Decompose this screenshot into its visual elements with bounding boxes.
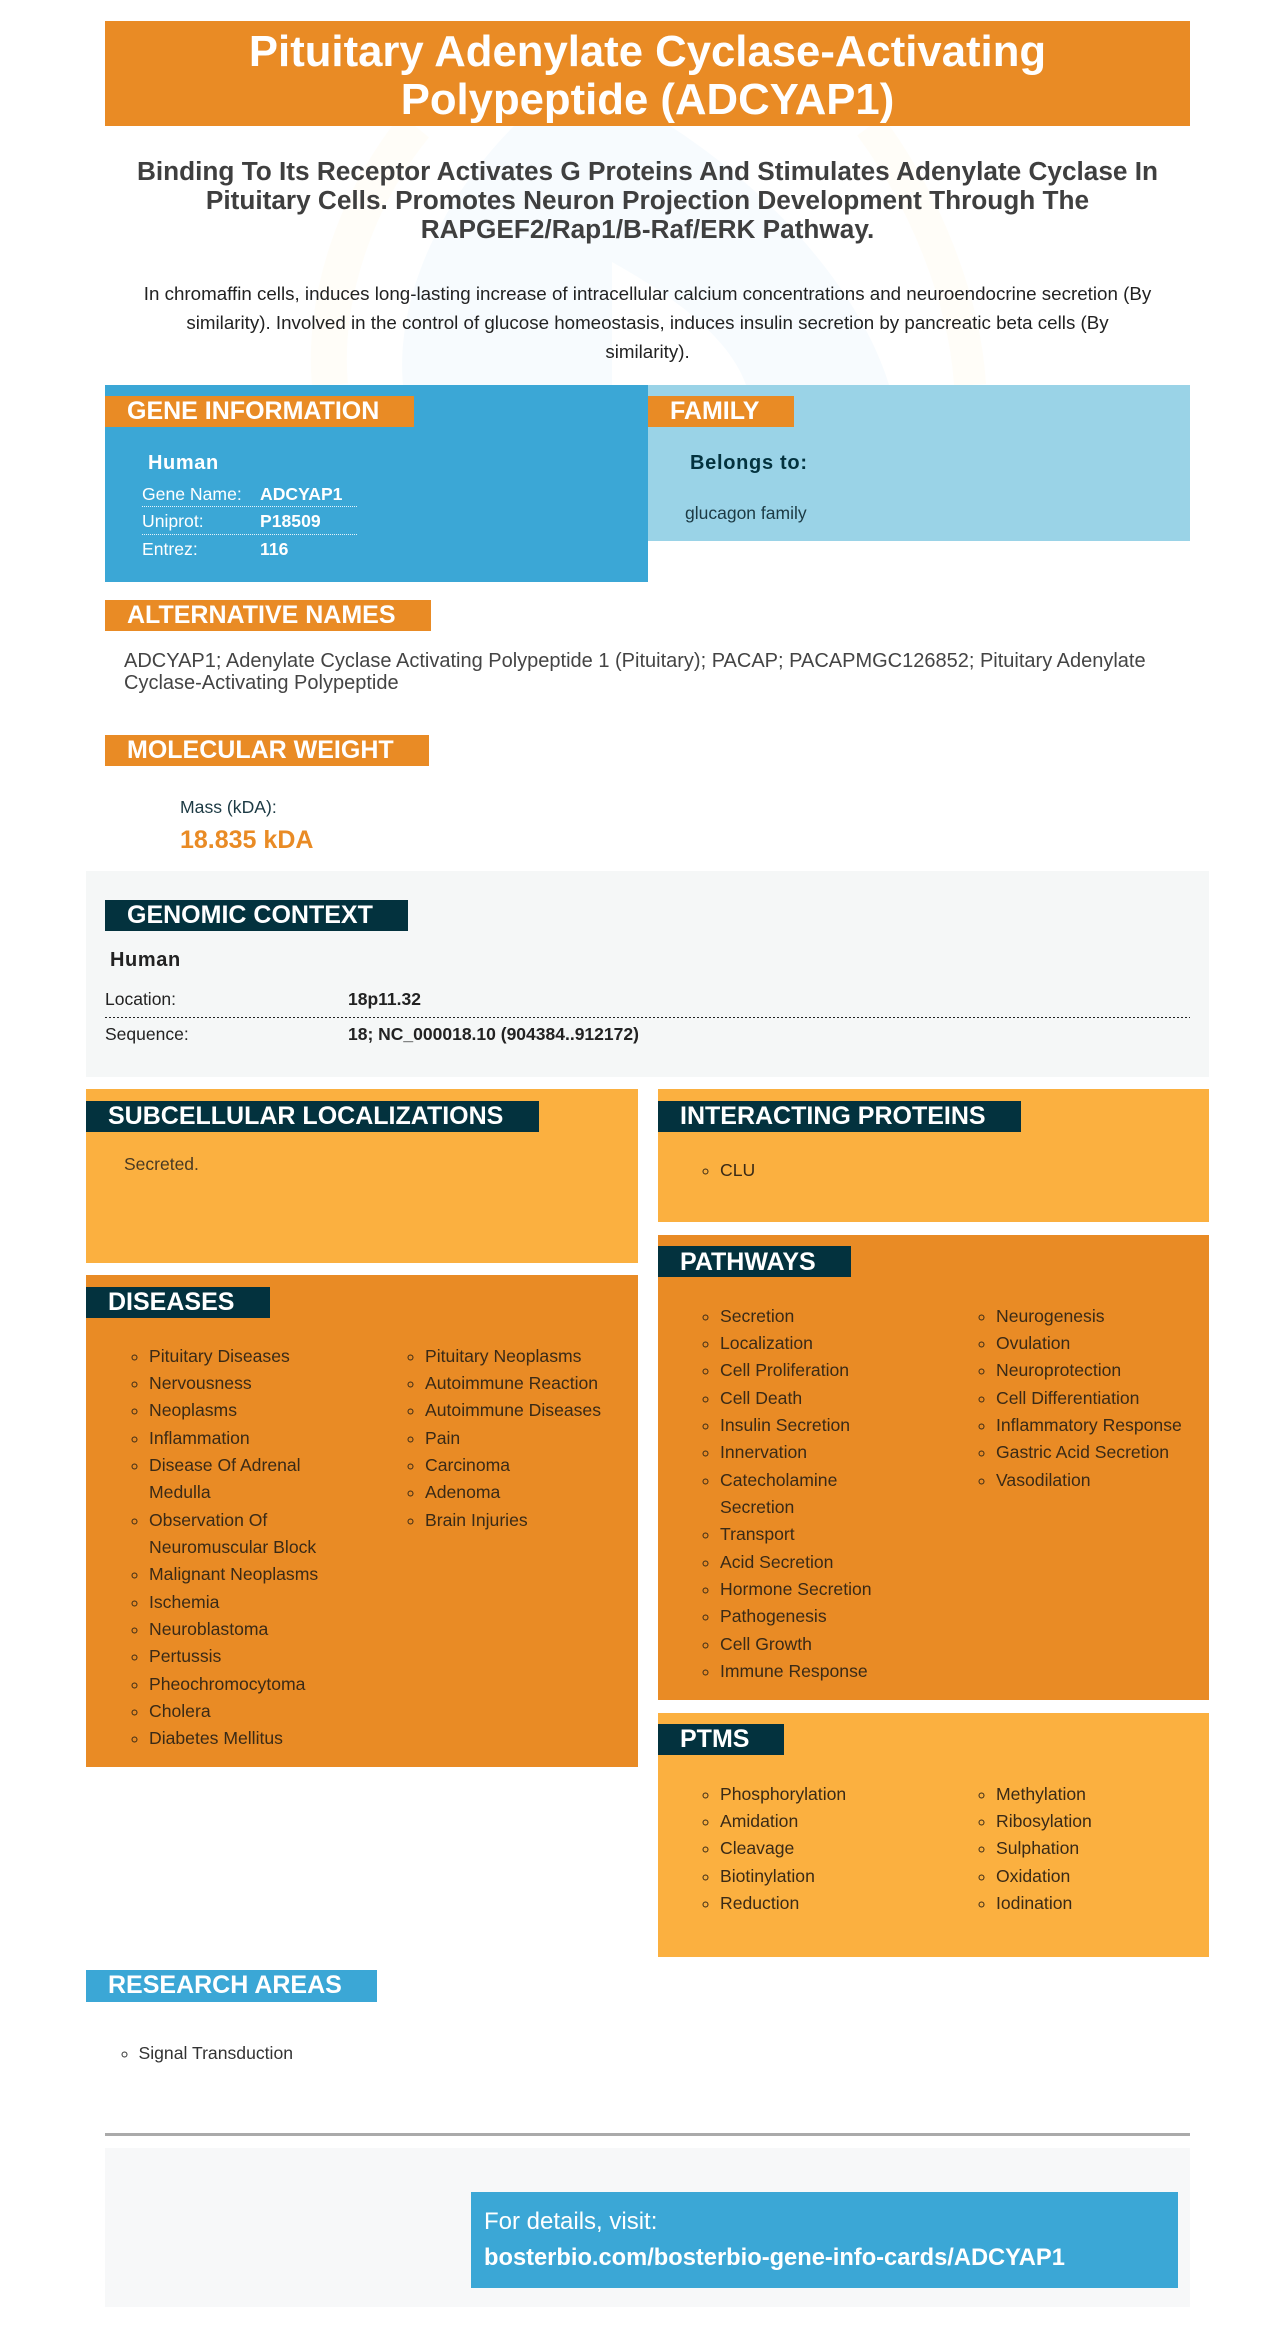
footer rule [105,2133,1190,2136]
panel: interacting proteins [658,1089,1209,1222]
subtitle: RAPGEF2/Rap1/B-Raf/ERK Pathway. [421,214,874,244]
location row [105,988,1190,1018]
localization text: Secreted. [124,1154,199,1174]
heading: gene information: GENE INFORMATION [127,397,379,425]
heading: research areas: RESEARCH AREAS [108,1971,342,1999]
alternative names text: Cyclase-Activating Polypeptide [124,672,399,694]
disease list column 1: Neuroblastoma [149,1619,268,1639]
disease list column 1: Pertussis [149,1646,221,1666]
heading: pathways: PATHWAYS [680,1248,816,1276]
gene rows [142,484,357,559]
panel: genomic context [86,871,1209,1077]
disease list column 2: Autoimmune Diseases [425,1400,601,1420]
heading: molecular weight: MOLECULAR WEIGHT [127,736,394,764]
heading: family: FAMILY [670,397,759,425]
disease list column 1: Cholera [149,1701,211,1721]
heading: family [648,396,794,427]
description: In chromaffin cells, induces long-lasting increase of intracellular calcium concentrations and neuroendocrine secretion (By [144,283,1151,304]
family value: glucagon family [685,503,807,523]
mass label: Mass (kDA): [180,797,277,817]
disease list column 1: Nervousness [149,1373,252,1393]
subtitle [137,156,1158,244]
panel: footer [105,2148,1190,2307]
panel: family [648,385,1190,541]
pathway list column 2: Neurogenesis [996,1306,1105,1326]
heading: ptms: PTMS [680,1725,749,1753]
belongs to label: Belongs to: [690,452,808,474]
background watermark [0,126,1288,385]
heading: diseases [86,1287,270,1318]
disease list column 1: Inflammation [149,1428,250,1448]
subtitle: Binding To Its Receptor Activates G Proteins And Stimulates Adenylate Cyclase In [137,156,1158,186]
ptm list column 1 [702,1784,846,1913]
disease list column 1: Ischemia [149,1592,219,1612]
disease list column 2: Pituitary Neoplasms [425,1346,581,1366]
panel: ptms [658,1713,1209,1957]
title: Polypeptide (ADCYAP1) [401,75,894,124]
species label: Human [110,949,181,971]
research areas list: Signal Transduction [138,2043,293,2063]
disease list column 1: Observation Of [149,1510,267,1530]
pathway list column 2: Inflammatory Response [996,1415,1182,1435]
pathway list column 1: Secretion [720,1306,794,1326]
disease list column 1: Medulla [149,1482,211,1502]
pathway list column 1 [702,1306,872,1681]
disease list column 1: Pheochromocytoma [149,1674,305,1694]
description [144,283,1152,362]
pathway list column 1: Cell Death [720,1388,802,1408]
pathway list column 1: Cell Proliferation [720,1360,849,1380]
disease list column 2 [408,1346,601,1530]
ptm list column 1: Reduction [720,1893,799,1913]
ptm list column 2: Ribosylation [996,1811,1092,1831]
disease list column 1 [132,1346,318,1748]
ptm list column 2 [978,1784,1092,1913]
disease list column 1: Neuromuscular Block [149,1537,316,1557]
disease list column 1: Neoplasms [149,1400,237,1420]
heading: interacting proteins: INTERACTING PROTEINS [680,1102,986,1130]
panel: subcellular localizations [86,1089,638,1263]
alternative names text: ADCYAP1; Adenylate Cyclase Activating Polypeptide 1 (Pituitary); PACAP; PACAPMGC126852; Pituitary Adenylate [124,650,1146,672]
subtitle: Pituitary Cells. Promotes Neuron Projection Development Through The [206,185,1089,215]
disease list column 2: Carcinoma [425,1455,510,1475]
visit label: For details, visit: [484,2208,657,2235]
heading: ptms [658,1724,784,1755]
alternative names text [124,650,1146,694]
disease list column 2: Brain Injuries [425,1510,528,1530]
sequence row: Sequence: [105,1024,189,1044]
disease list column 1: Malignant Neoplasms [149,1564,318,1584]
location row: 18p11.32 [348,989,421,1009]
sequence row [105,1024,639,1044]
gene rows: Uniprot: [142,511,204,531]
gene rows: 116 [260,539,288,559]
title: Pituitary Adenylate Cyclase-Activating [249,27,1046,76]
description: similarity). [605,341,690,362]
gene rows: ADCYAP1 [260,484,342,504]
sequence row: 18; NC_000018.10 (904384..912172) [348,1024,639,1044]
panel: diseases [86,1275,638,1767]
call to action box [471,2192,1178,2288]
pathway list column 2: Neuroprotection [996,1360,1121,1380]
location row: Location: [105,989,176,1009]
ptm list column 2: Iodination [996,1893,1072,1913]
heading: alternative names: ALTERNATIVE NAMES [127,601,396,629]
ptm list column 1: Amidation [720,1811,798,1831]
disease list column 2: Pain [425,1428,460,1448]
title [105,21,1190,126]
disease list column 2: Adenoma [425,1482,500,1502]
mass value: 18.835 kDA [180,826,313,854]
disease list column 1: Disease Of Adrenal [149,1455,301,1475]
panel: gene information [105,385,648,582]
pathway list column 1: Pathogenesis [720,1606,827,1626]
pathway list column 1: Hormone Secretion [720,1579,872,1599]
visit link: bosterbio.com/bosterbio-gene-info-cards/ADCYAP1 [484,2245,1065,2271]
disease list column 1: Diabetes Mellitus [149,1728,283,1748]
pathway list column 2: Cell Differentiation [996,1388,1139,1408]
pathway list column 1: Cell Growth [720,1634,812,1654]
description: similarity). Involved in the control of glucose homeostasis, induces insulin secretion by pancreatic beta cells (By [186,312,1109,333]
gene rows: Entrez: [142,539,198,559]
species label: Human [148,452,219,474]
pathway list column 1: Acid Secretion [720,1552,833,1572]
pathway list column 1: Localization [720,1333,813,1353]
panel: pathways [658,1235,1209,1700]
disease list column 1: Pituitary Diseases [149,1346,290,1366]
heading: diseases: DISEASES [108,1288,234,1316]
ptm list column 2: Sulphation [996,1838,1079,1858]
pathway list column 1: Transport [720,1524,795,1544]
protein list: CLU [720,1160,755,1180]
pathway list column 1: Catecholamine [720,1470,837,1490]
heading: subcellular localizations: SUBCELLULAR LOCALIZATIONS [108,1102,503,1130]
pathway list column 1: Immune Response [720,1661,868,1681]
disease list column 2: Autoimmune Reaction [425,1373,598,1393]
ptm list column 1: Biotinylation [720,1866,815,1886]
heading: genomic context: GENOMIC CONTEXT [127,901,373,929]
pathway list column 2: Vasodilation [996,1470,1091,1490]
ptm list column 2: Methylation [996,1784,1086,1804]
ptm list column 2: Oxidation [996,1866,1070,1886]
pathway list column 2: Gastric Acid Secretion [996,1442,1169,1462]
ptm list column 1: Cleavage [720,1838,794,1858]
heading: pathways [658,1246,850,1277]
pathway list column 1: Innervation [720,1442,807,1462]
gene rows: P18509 [260,511,321,531]
pathway list column 1: Secretion [720,1497,794,1517]
pathway list column 1: Insulin Secretion [720,1415,850,1435]
ptm list column 1: Phosphorylation [720,1784,846,1804]
pathway list column 2: Ovulation [996,1333,1070,1353]
gene rows: Gene Name: [142,484,242,504]
pathway list column 2 [978,1306,1182,1490]
